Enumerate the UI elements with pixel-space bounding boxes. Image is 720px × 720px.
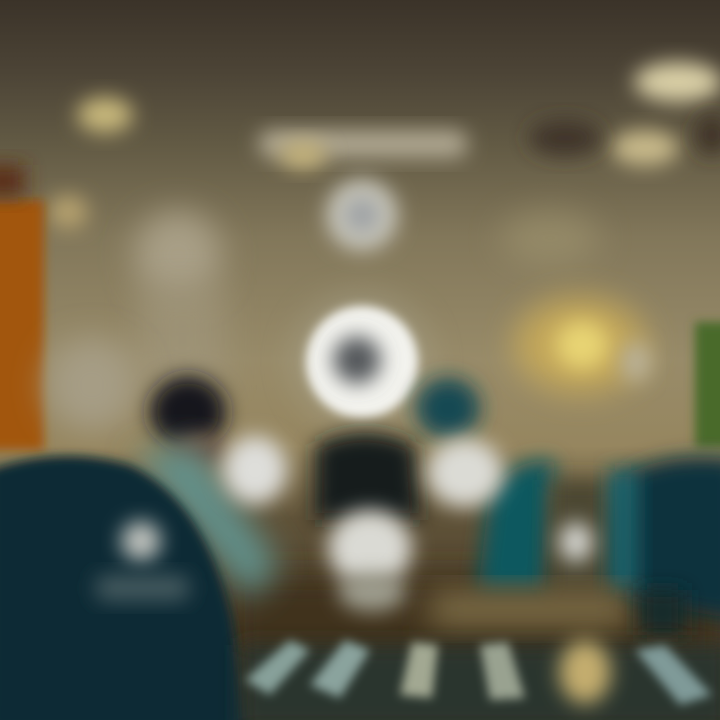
ceiling lights (48, 62, 720, 229)
yellow glow (514, 297, 651, 393)
lower foreground dark band (230, 575, 720, 720)
person right head (416, 378, 480, 438)
left orange column (0, 165, 44, 450)
teal right chairs (478, 457, 720, 620)
small top circle icon (326, 179, 398, 251)
white floating bubbles (223, 436, 503, 612)
person left head (135, 376, 280, 600)
person centre torso (315, 432, 420, 520)
right green column (695, 322, 720, 447)
faint wall panels (46, 210, 600, 431)
title text glow (258, 130, 468, 169)
table with items (240, 590, 720, 720)
dark teal left chair (0, 456, 248, 720)
main white circle icon (294, 294, 430, 430)
